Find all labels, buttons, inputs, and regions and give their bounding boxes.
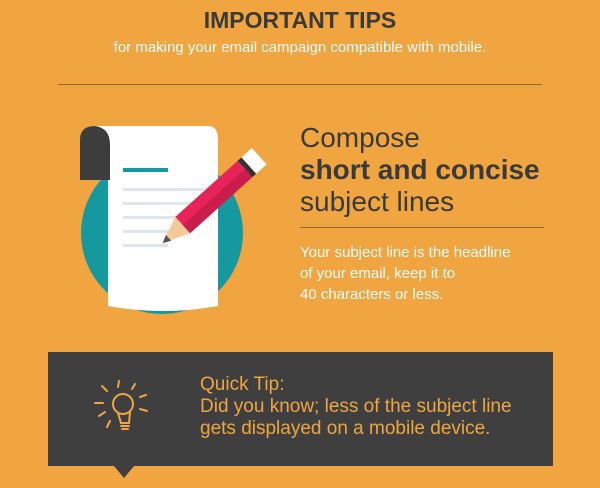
tip text: [200, 374, 512, 439]
pointer: [114, 466, 134, 478]
icon: light bulb: [94, 380, 148, 430]
heading: Compose: [300, 122, 420, 153]
body text: Your subject line is the headline: [300, 244, 510, 261]
heading: subject lines: [300, 186, 454, 217]
body text: of your email, keep it to: [300, 265, 455, 282]
heading: short and concise: [300, 154, 540, 185]
body text: 40 characters or less.: [300, 286, 443, 303]
heading: [300, 122, 540, 217]
tip text: Quick Tip:: [200, 374, 284, 395]
title: IMPORTANT TIPS: [204, 7, 396, 33]
tip text: Did you know; less of the subject line: [200, 396, 512, 417]
body text: [300, 244, 510, 303]
panel: quick tip: [48, 352, 553, 466]
icon: document with pencil: [80, 126, 266, 314]
subtitle: for making your email campaign compatible with mobile.: [114, 39, 486, 56]
tip text: gets displayed on a mobile device.: [200, 418, 490, 439]
